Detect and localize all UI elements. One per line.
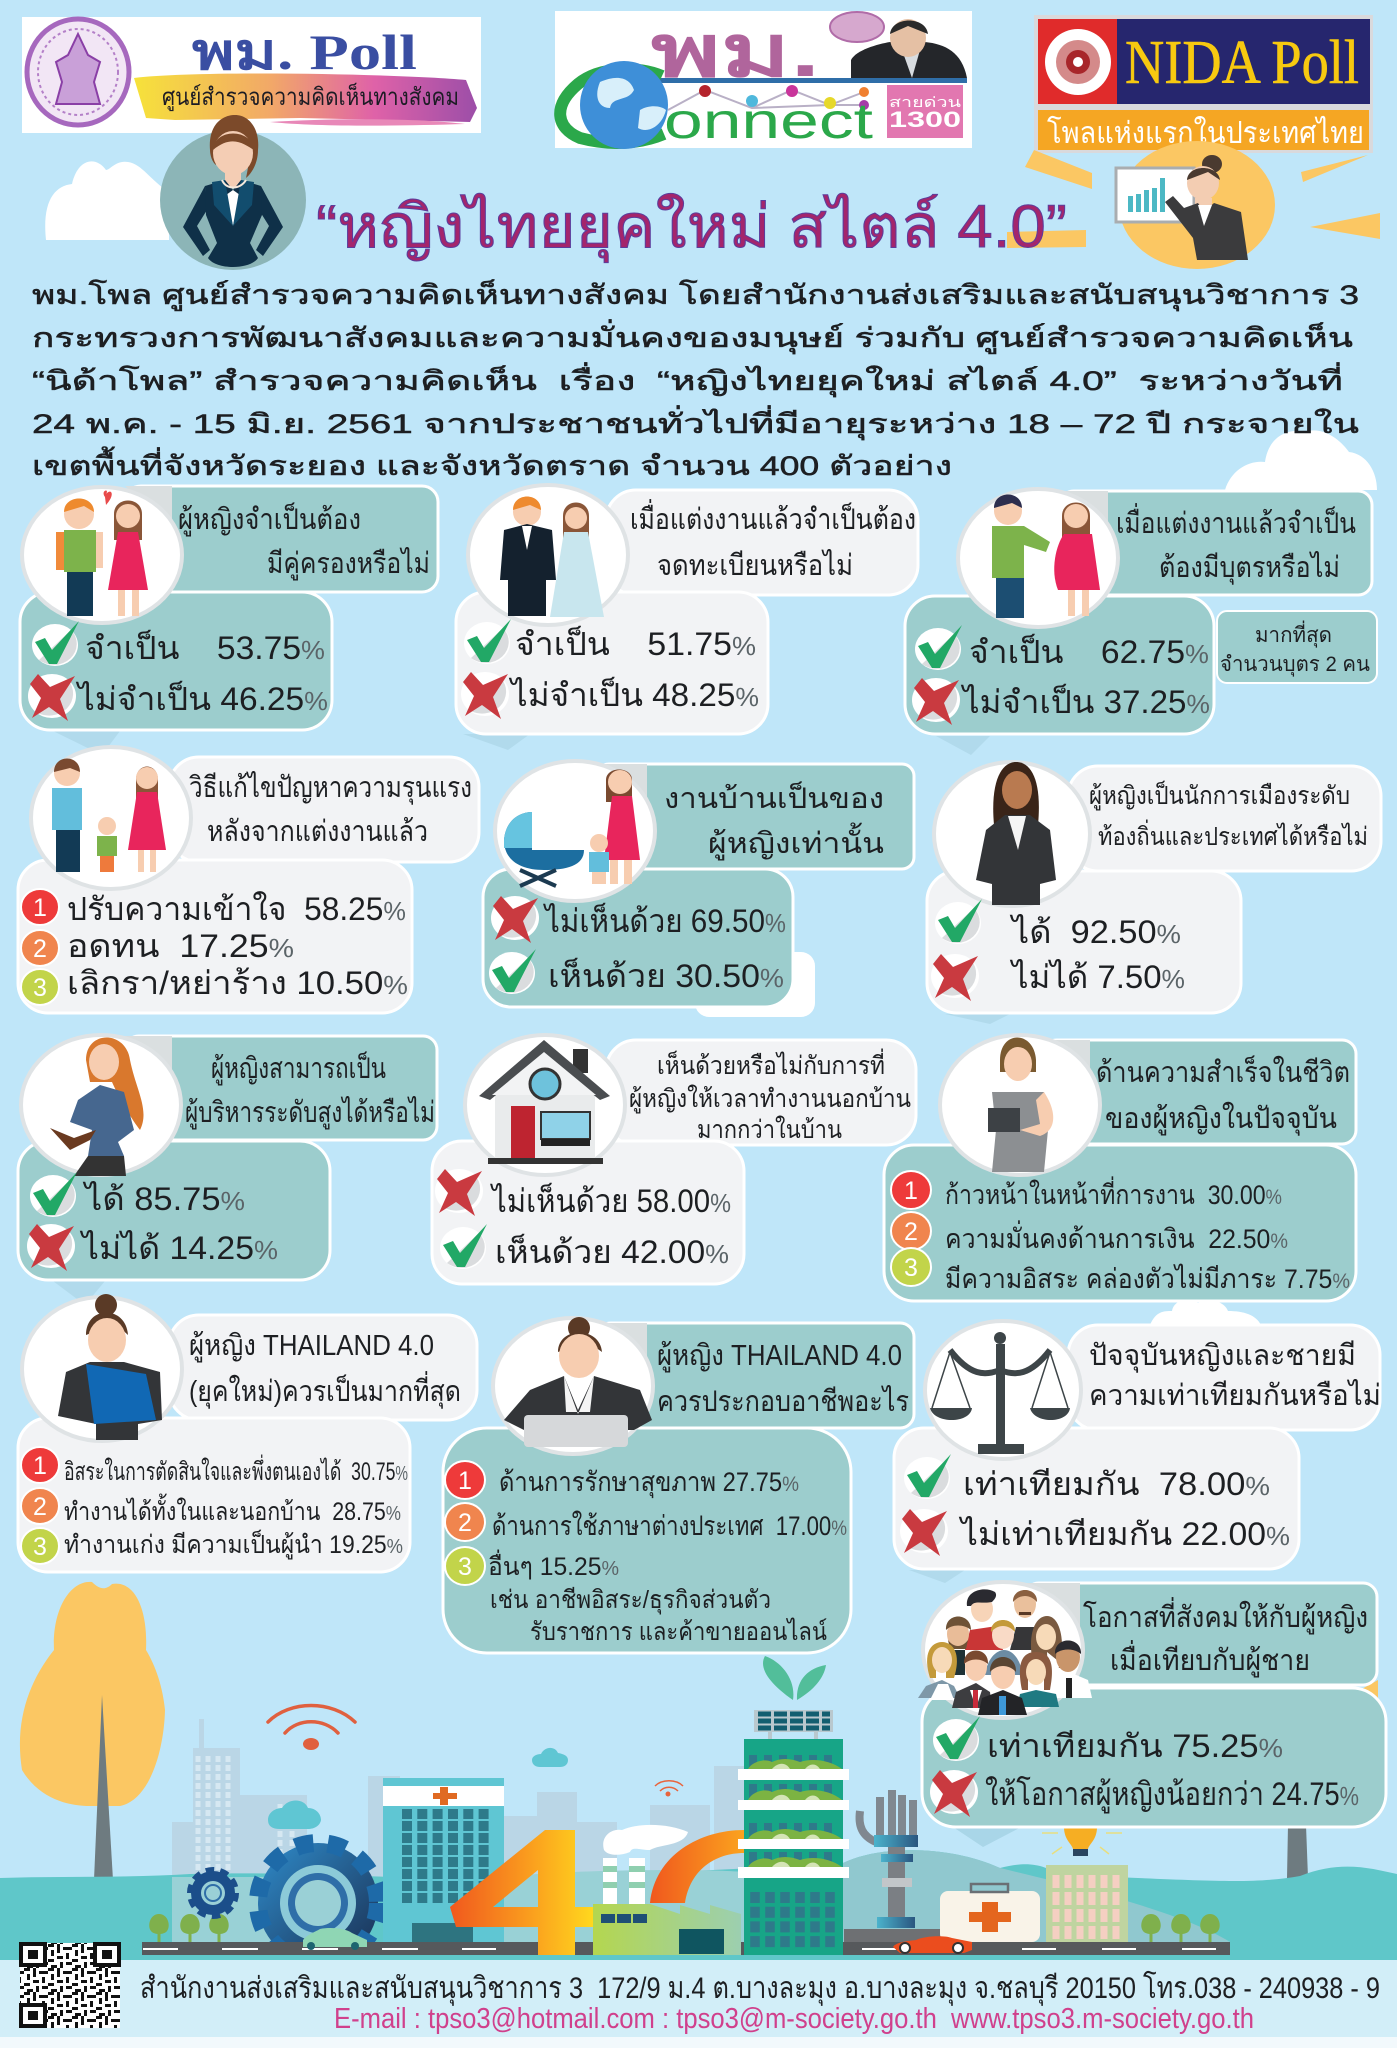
- cloud: right of intro: [1225, 430, 1377, 490]
- rank 1: ก้าวหน้าในหน้าที่การงาน 30.00%: [945, 1176, 1282, 1210]
- intro paragraph: เขตพื้นที่จังหวัดระยอง และจังหวัดตราด จำนวน 400 ตัวอย่าง: [32, 446, 952, 481]
- icon: woman at laptop: [504, 1317, 652, 1447]
- result: agree: เห็นด้วย 30.50 %: [548, 957, 784, 994]
- icon: woman with folder: [58, 1294, 162, 1440]
- result: not necessary: [912, 678, 1210, 725]
- panel: housework: [483, 761, 914, 1017]
- logo: MSDHS Poll: ศูนย์สำรวจความคิดเห็นทางสังคม: [162, 82, 459, 112]
- result: equal: [904, 1454, 1270, 1502]
- result: not necessary: ไม่จำเป็น 48.25 %: [508, 676, 759, 713]
- rank 3: 3: [458, 1553, 472, 1581]
- heading: [189, 1330, 461, 1409]
- panel: Thailand 4.0 qualities: [18, 1294, 477, 1572]
- heading: ควรประกอบอาชีพอะไร: [657, 1384, 909, 1418]
- heading: ผู้หญิงจำเป็นต้อง: [178, 501, 361, 537]
- rank 1: 1: [458, 1467, 472, 1495]
- icon: scales of justice: [930, 1332, 1070, 1454]
- result: equal: เท่าเทียมกัน 78.00 %: [963, 1466, 1270, 1502]
- result: disagree: ไม่เห็นด้วย 69.50%: [542, 902, 786, 939]
- rank 2: 2: [33, 1493, 47, 1521]
- heading: หลังจากแต่งงานแล้ว: [207, 816, 428, 848]
- result: disagree: [491, 896, 786, 943]
- rank 1: [21, 1447, 408, 1486]
- heading: เมื่อแต่งงานแล้วจำเป็น: [1116, 503, 1356, 540]
- logo: NIDA Poll: [1034, 15, 1373, 153]
- panel: Thailand 4.0 careers: [443, 1317, 914, 1653]
- title: “หญิงไทยยุคใหม่ สไตล์ 4.0”: [316, 192, 1067, 263]
- heading: จดทะเบียนหรือไม่: [657, 548, 853, 582]
- heading: วิธีแก้ไขปัญหาความรุนแรง: [189, 770, 472, 805]
- green car: [303, 1928, 367, 1950]
- cloud icons: [268, 1748, 568, 1829]
- heading: เมื่อแต่งงานแล้วจำเป็นต้อง: [630, 499, 916, 536]
- heading: ผู้หญิงให้เวลาทำงานนอกบ้าน: [629, 1084, 911, 1114]
- result: agree: เห็นด้วย 42.00 %: [495, 1233, 729, 1270]
- heading: โอกาสที่สังคมให้กับผู้หญิง: [1083, 1597, 1368, 1635]
- heading: ท้องถิ่นและประเทศได้หรือไม่: [1098, 819, 1368, 851]
- bottom scene: city: [0, 1582, 1397, 1963]
- hospital: [383, 1778, 504, 1942]
- result: agree: [489, 949, 784, 994]
- icon: house: [479, 1040, 610, 1164]
- result: cannot: [27, 1224, 278, 1271]
- first aid kit: [940, 1884, 1040, 1942]
- icon: bride and groom: [500, 496, 604, 617]
- result: equal: [933, 1716, 1283, 1764]
- result: unequal: ไม่เท่าเทียมกัน 22.00 %: [958, 1516, 1290, 1552]
- gears: [191, 1843, 378, 1963]
- heading: [1089, 780, 1368, 851]
- logo: NIDA Poll: โพลแห่งแรกในประเทศไทย: [1047, 115, 1364, 150]
- panel: having children: [905, 489, 1377, 755]
- illustration: presenter woman: [1116, 155, 1248, 260]
- heading: มีคู่ครองหรือไม่: [267, 546, 430, 581]
- result: necessary: จำเป็น 62.75 %: [969, 633, 1209, 670]
- rank 2: [21, 1488, 401, 1526]
- result: can: [935, 899, 1181, 950]
- heading: [664, 780, 884, 861]
- heading: ผู้หญิง THAILAND 4.0: [657, 1340, 902, 1373]
- footer band: [0, 1960, 1397, 2037]
- rank 2: ด้านการใช้ภาษาต่างประเทศ 17.00%: [492, 1510, 847, 1541]
- result: necessary: จำเป็น 51.75 %: [515, 625, 756, 662]
- heading: [1116, 503, 1356, 585]
- result: not necessary: [461, 672, 759, 719]
- panel: work outside the home: [432, 1035, 916, 1284]
- cloud: top left: [45, 161, 169, 240]
- rank 3: [445, 1547, 619, 1585]
- beige building: [1046, 1865, 1128, 1942]
- result: necessary: [464, 619, 756, 664]
- logo: Connect: [555, 11, 972, 149]
- icon: woman with notebook: [50, 1038, 144, 1176]
- rank 1: 1: [33, 894, 47, 922]
- rank 2: 2: [904, 1218, 918, 1246]
- logo: MSDHS Poll: [22, 17, 481, 133]
- intro paragraph: [32, 277, 1359, 481]
- icon: woman with tablet: [988, 1038, 1053, 1172]
- result: necessary: [915, 625, 1209, 670]
- heading: (ยุคใหม่)ควรเป็นมากที่สุด: [189, 1371, 461, 1409]
- icon: family: [52, 758, 166, 872]
- wifi symbol: [268, 1706, 355, 1750]
- big number 4: [450, 1830, 593, 1955]
- icon: mother with stroller: [504, 770, 640, 886]
- result: not necessary: ไม่จำเป็น 46.25 %: [75, 680, 328, 717]
- rank 2: 2: [33, 935, 47, 963]
- rank 3: อื่นๆ 15.25%: [488, 1549, 619, 1581]
- rank 3: [891, 1248, 1350, 1294]
- logo: Connect: onnect: [664, 93, 873, 149]
- rank 3: มีความอิสระ คล่องตัวไม่มีภาระ 7.75%: [945, 1264, 1350, 1294]
- heading: [630, 499, 916, 582]
- result: cannot: [931, 954, 1185, 1001]
- tree: left: [20, 1582, 165, 1880]
- sun and rays: [1007, 141, 1380, 269]
- panel: register marriage: [456, 485, 918, 750]
- heading: [1089, 1340, 1381, 1412]
- rank 2: ความมั่นคงด้านการเงิน 22.50%: [945, 1220, 1288, 1254]
- rank 1: [891, 1171, 1282, 1210]
- result: disagree: [435, 1169, 731, 1219]
- heading: ผู้หญิง THAILAND 4.0: [189, 1330, 434, 1363]
- rank 2: ทำงานได้ทั้งในและนอกบ้าน 28.75%: [64, 1493, 401, 1526]
- heading: [629, 1048, 911, 1144]
- panel: equality today: [894, 1321, 1381, 1583]
- cloud: above panel 12: [1150, 1300, 1261, 1325]
- heading: ความเท่าเทียมกันหรือไม่: [1089, 1378, 1381, 1412]
- result: less opportunity: ให้โอกาสผู้หญิงน้อยกว่า 24.75%: [985, 1776, 1359, 1814]
- hills and sea: [0, 1850, 1397, 1962]
- intro paragraph: พม.โพล ศูนย์สำรวจความคิดเห็นทางสังคม โดยสำนักงานส่งเสริมและสนับสนุนวิชาการ 3: [32, 277, 1359, 312]
- result: can: ได้ 85.75 %: [82, 1181, 245, 1217]
- rank 3: 3: [904, 1254, 918, 1282]
- heading: ปัจจุบันหญิงและชายมี: [1089, 1340, 1356, 1373]
- callout: two children: [1217, 611, 1377, 683]
- light bulb: [1042, 1827, 1122, 1856]
- heading: ผู้หญิงเป็นนักการเมืองระดับ: [1089, 780, 1350, 811]
- rank 3: 3: [33, 1533, 47, 1561]
- icon: crowd of people: [918, 1589, 1092, 1715]
- heading: ผู้บริหารระดับสูงได้หรือไม่: [185, 1095, 435, 1130]
- orange car: [893, 1936, 972, 1953]
- panel: success in life: [884, 1035, 1356, 1301]
- heading: เห็นด้วยหรือไม่กับการที่: [657, 1048, 885, 1080]
- heading: เมื่อเทียบกับผู้ชาย: [1110, 1640, 1310, 1678]
- rank 3: ทำงานเก่ง มีความเป็นผู้นำ 19.25%: [64, 1529, 403, 1560]
- heading: ของผู้หญิงในปัจจุบัน: [1105, 1101, 1337, 1136]
- heading: [185, 1050, 435, 1130]
- rank 1: 1: [33, 1452, 47, 1480]
- tall green building: [738, 1710, 849, 1955]
- result: not necessary: ไม่จำเป็น 37.25 %: [960, 683, 1210, 720]
- panel: social opportunity: [918, 1582, 1386, 1847]
- intro paragraph: “นิด้าโพล” สำรวจความคิดเห็น เรื่อง “หญิงไทยยุคใหม่ สไตล์ 4.0” ระหว่างวันที่: [32, 362, 1343, 398]
- heading: งานบ้านเป็นของ: [664, 780, 884, 815]
- factory: [593, 1904, 741, 1955]
- smoke and chimneys: [603, 1825, 688, 1904]
- leaves: [763, 1656, 826, 1700]
- footer bottom strip: [0, 2037, 1397, 2048]
- panel: violence after marriage: [18, 747, 479, 1013]
- letter C: [650, 1830, 744, 1903]
- heading: [1083, 1597, 1368, 1678]
- rank 2: อดทน 17.25 %: [67, 928, 294, 964]
- result: disagree: ไม่เห็นด้วย 58.00%: [489, 1182, 731, 1219]
- result: unequal: [900, 1509, 1290, 1556]
- heading: มากกว่าในบ้าน: [697, 1115, 842, 1144]
- robot arm: [860, 1790, 918, 1928]
- result: cannot: ไม่ได้ 14.25 %: [79, 1230, 278, 1266]
- QR code: [20, 1943, 120, 2028]
- intro paragraph: 24 พ.ค. - 15 มิ.ย. 2561 จากประชาชนทั่วไปที่มีอายุระหว่าง 18 – 72 ปี กระจายใน: [32, 405, 1359, 441]
- result: cannot: ไม่ได้ 7.50%: [1009, 959, 1185, 995]
- note: other careers: เช่น อาชีพอิสระ/ธุรกิจส่วนตัว: [490, 1586, 771, 1615]
- heading: [657, 1340, 909, 1418]
- heading: ผู้หญิงสามารถเป็น: [211, 1050, 386, 1086]
- result: necessary: จำเป็น 53.75 %: [85, 629, 325, 666]
- heading: [178, 501, 430, 581]
- icon: couple: [56, 490, 148, 616]
- callout: two children: มากที่สุด: [1255, 620, 1332, 648]
- footer contact: E-mail : tpso3@hotmail.com : tpso3@m-society.go.th www.tpso3.m-society.go.th: [334, 2003, 1254, 2035]
- heading: [189, 770, 472, 848]
- result: necessary: [32, 621, 325, 666]
- heading: ผู้หญิงเท่านั้น: [708, 822, 884, 861]
- panel: partner needed: [20, 486, 438, 755]
- result: less opportunity: [930, 1770, 1359, 1817]
- logo: MSDHS Poll: พม. Poll: [192, 24, 417, 80]
- heading: ด้านความสำเร็จในชีวิต: [1096, 1054, 1350, 1089]
- heading: [1096, 1054, 1350, 1136]
- rank 1: ด้านการรักษาสุขภาพ 27.75%: [499, 1467, 799, 1499]
- rank 1: อิสระในการตัดสินใจและพึ่งตนเองได้ 30.75%: [64, 1454, 408, 1486]
- result: equal: เท่าเทียมกัน 75.25 %: [987, 1728, 1283, 1764]
- rank 1: [445, 1461, 799, 1499]
- small trees: [149, 1914, 1220, 1942]
- rank 2: 2: [458, 1509, 472, 1537]
- rank 3: [21, 1528, 403, 1564]
- panel: women politicians: [927, 762, 1381, 1024]
- rank 3: เลิกรา/หย่าร้าง 10.50 %: [67, 965, 408, 1001]
- result: can: [30, 1172, 245, 1217]
- icon: woman politician: [976, 762, 1056, 905]
- logo: Connect: พม.: [651, 12, 820, 92]
- rank 2: [445, 1503, 847, 1541]
- note: other careers: [490, 1586, 827, 1646]
- heading: ต้องมีบุตรหรือไม่: [1159, 550, 1340, 585]
- callout: two children: จำนวนบุตร 2 คน: [1220, 653, 1370, 677]
- result: can: ได้ 92.50 %: [1009, 914, 1181, 950]
- far buildings: [172, 1719, 744, 1942]
- result: not necessary: [28, 674, 328, 721]
- tree: right trunk: [1287, 1825, 1308, 1878]
- icon: expecting couple: [992, 494, 1100, 618]
- note: other careers: รับราชการ และค้าขายออนไลน์: [530, 1617, 827, 1646]
- logo: Connect: สายด่วน: [889, 94, 962, 110]
- rank 2: [891, 1212, 1288, 1254]
- illustration: businesswoman in teal circle: [160, 115, 306, 270]
- rank 1: ปรับความเข้าใจ 58.25%: [67, 891, 406, 927]
- road: [142, 1929, 1230, 1955]
- result: agree: [440, 1224, 729, 1270]
- logo: Connect: 1300: [889, 107, 961, 132]
- logo: NIDA Poll: NIDA Poll: [1125, 29, 1359, 97]
- panel: senior executive: [18, 1035, 437, 1305]
- rank 1: 1: [904, 1177, 918, 1205]
- rank 3: 3: [33, 974, 47, 1002]
- intro paragraph: กระทรวงการพัฒนาสังคมและความมั่นคงของมนุษย์ ร่วมกับ ศูนย์สำรวจความคิดเห็น: [32, 319, 1353, 355]
- small wifi symbol: [655, 1781, 683, 1796]
